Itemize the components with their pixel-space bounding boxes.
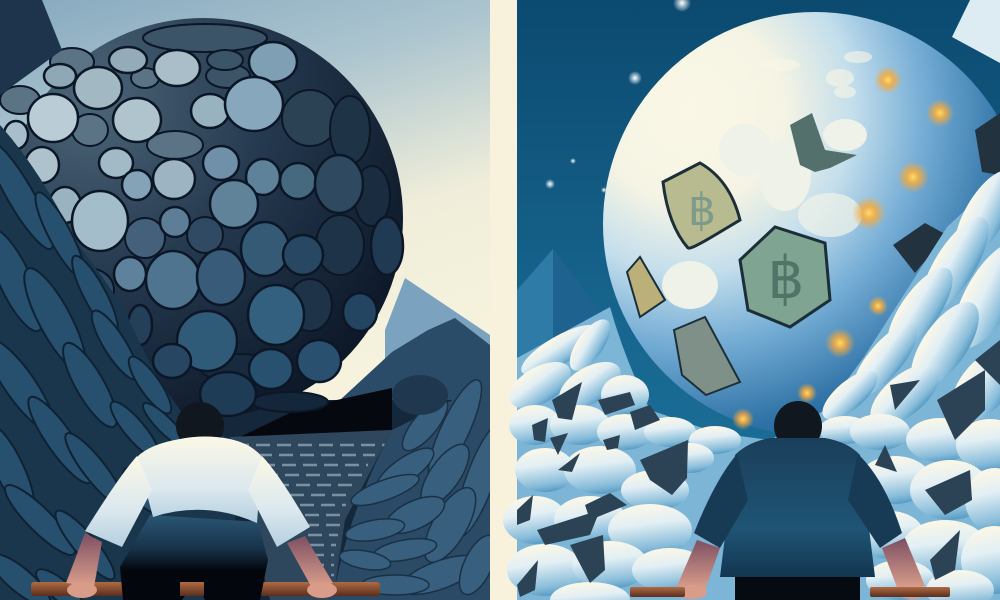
coin: ฿	[768, 244, 804, 312]
figure: man in dark jacket	[630, 401, 950, 600]
shirt sleeve right	[248, 456, 310, 547]
coin	[975, 113, 1000, 175]
jacket body	[720, 438, 875, 577]
half-buried coins	[517, 340, 1000, 597]
trousers	[735, 570, 860, 600]
snow ridges	[760, 51, 872, 98]
head	[774, 401, 822, 451]
left cliff	[0, 0, 240, 600]
panel: right sky	[517, 0, 1000, 600]
panel: left sky	[0, 0, 490, 600]
hands	[677, 585, 707, 599]
shirt torso	[137, 436, 262, 523]
left road and ground	[160, 374, 514, 600]
hands	[67, 582, 97, 598]
wooden bar	[31, 582, 380, 596]
snow lumps	[502, 162, 1000, 600]
trousers	[120, 515, 268, 600]
coin	[627, 257, 665, 317]
head	[176, 402, 224, 450]
jacket sleeve left	[694, 454, 748, 548]
arms	[677, 540, 720, 590]
shirt sleeve left	[85, 456, 152, 547]
stars	[545, 0, 691, 193]
jacket sleeve right	[848, 454, 902, 548]
coins	[4, 42, 403, 416]
divider	[490, 0, 517, 600]
coin	[740, 227, 830, 327]
coin boulder	[0, 18, 403, 418]
cobbled road	[230, 430, 392, 600]
figure: man in white shirt	[31, 402, 380, 600]
bar	[630, 587, 950, 597]
top-right snow	[952, 0, 1000, 63]
coin	[893, 223, 947, 273]
right stones	[333, 385, 490, 600]
coin	[790, 113, 857, 172]
left distant mountains	[340, 278, 490, 470]
coin	[674, 317, 740, 395]
coin: ฿	[688, 185, 716, 236]
cliff ridges	[0, 135, 192, 600]
arms	[66, 533, 102, 587]
snow ground	[502, 0, 1000, 600]
distant peak	[517, 249, 607, 360]
coin	[663, 163, 740, 248]
glowing lights	[732, 66, 954, 430]
background coins	[0, 24, 390, 412]
snowball	[603, 12, 1000, 436]
